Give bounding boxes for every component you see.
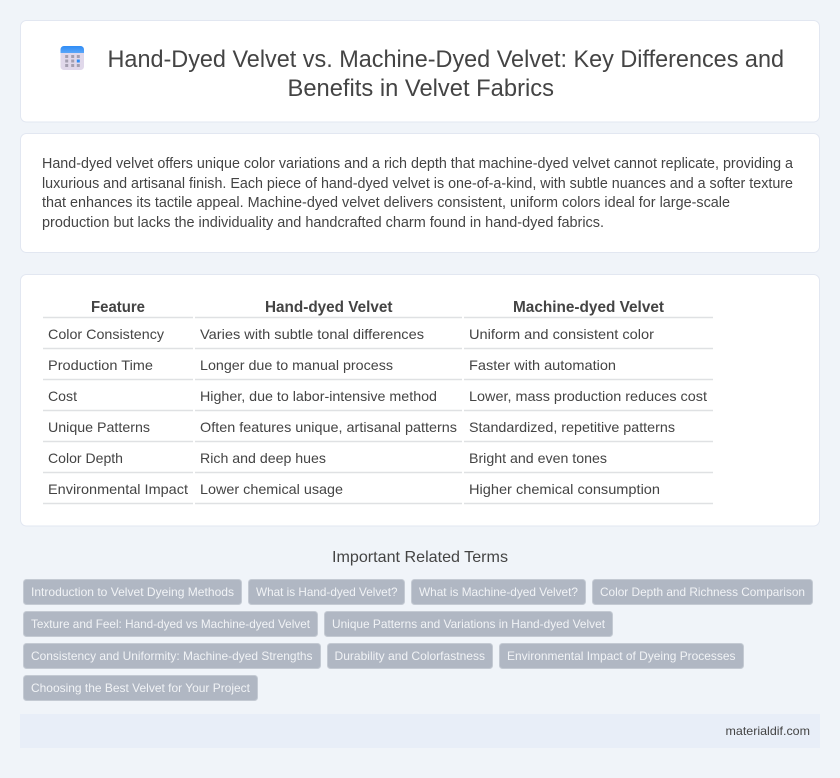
row: color consistency: [48, 326, 654, 342]
related terms chips: [24, 580, 812, 700]
chip: [412, 580, 586, 604]
intro paragraph: luxurious and artisanal finish. Each piece of hand-dyed velvet is one-of-a-kind, with subtle nuances and a softer texture: [42, 176, 793, 192]
chip: What is Hand-dyed Velvet?: [256, 585, 398, 599]
row: environmental impact: [48, 481, 660, 497]
row: color depth: [48, 450, 607, 466]
row: cost: Lower, mass production reduces cost: [469, 388, 707, 404]
chip: Environmental Impact of Dyeing Processes: [507, 649, 736, 663]
row: environmental impact: Higher chemical consumption: [469, 481, 660, 497]
icon: calendar: [60, 46, 84, 70]
title: Hand-Dyed Velvet vs. Machine-Dyed Velvet: Key Differences and: [108, 46, 784, 73]
row: color consistency: Varies with subtle tonal differences: [200, 326, 424, 342]
table header: Machine-dyed Velvet: [513, 299, 665, 316]
row: cost: Higher, due to labor-intensive method: [200, 388, 437, 404]
row: unique patterns: [48, 419, 675, 435]
row: color consistency: Uniform and consistent color: [469, 326, 654, 342]
chip: Choosing the Best Velvet for Your Project: [31, 681, 251, 695]
chip: Texture and Feel: Hand-dyed vs Machine-dyed Velvet: [31, 617, 311, 631]
chip: [328, 644, 492, 668]
row: cost: [48, 388, 707, 404]
row: production time: Longer due to manual process: [200, 357, 393, 373]
chip: [248, 580, 404, 604]
panel: introduction: [20, 134, 820, 252]
table header: Feature: [91, 299, 145, 316]
row: color depth: Color Depth: [48, 450, 123, 466]
row: cost: Cost: [48, 388, 77, 404]
row: unique patterns: Standardized, repetitive patterns: [469, 419, 675, 435]
heading: important related terms: Important Related Terms: [332, 549, 508, 566]
row: color depth: Rich and deep hues: [200, 450, 326, 466]
title: [108, 46, 784, 102]
footer bar: [20, 714, 820, 748]
chip: Unique Patterns and Variations in Hand-dyed Velvet: [332, 617, 606, 631]
chip: Color Depth and Richness Comparison: [600, 585, 805, 599]
chip: Durability and Colorfastness: [334, 649, 485, 663]
row: unique patterns: Often features unique, artisanal patterns: [200, 419, 457, 435]
row: production time: Faster with automation: [469, 357, 616, 373]
row: environmental impact: Lower chemical usage: [200, 481, 343, 497]
chip: [24, 676, 258, 700]
chip: [24, 580, 242, 604]
row: environmental impact: Environmental Impact: [48, 481, 188, 497]
table header: Hand-dyed Velvet: [265, 299, 393, 316]
title: Benefits in Velvet Fabrics: [288, 75, 554, 102]
chip: [24, 612, 318, 636]
panel: title header: [20, 20, 820, 122]
row: unique patterns: Unique Patterns: [48, 419, 150, 435]
chip: What is Machine-dyed Velvet?: [419, 585, 578, 599]
chip: Consistency and Uniformity: Machine-dyed Strengths: [31, 649, 312, 663]
row: production time: Production Time: [48, 357, 153, 373]
chip: [24, 644, 320, 668]
row: color consistency: Color Consistency: [48, 326, 164, 342]
chip: [500, 644, 744, 668]
panel: comparison table: [20, 274, 820, 526]
chip: [592, 580, 812, 604]
intro paragraph: [42, 156, 793, 231]
row: production time: [48, 357, 616, 373]
row: color depth: Bright and even tones: [469, 450, 607, 466]
chip: Introduction to Velvet Dyeing Methods: [31, 585, 234, 599]
table header: [91, 299, 665, 316]
intro paragraph: Hand-dyed velvet offers unique color variations and a rich depth that machine-dyed velvet cannot replicate, providing a: [42, 156, 793, 172]
chip: [324, 612, 612, 636]
footer source: materialdif.com: [726, 724, 810, 738]
intro paragraph: that enhances its tactile appeal. Machine-dyed velvet delivers consistent, uniform colors ideal for large-scale: [42, 195, 730, 211]
intro paragraph: production but lacks the individuality and handcrafted charm found in hand-dyed fabrics.: [42, 215, 604, 231]
